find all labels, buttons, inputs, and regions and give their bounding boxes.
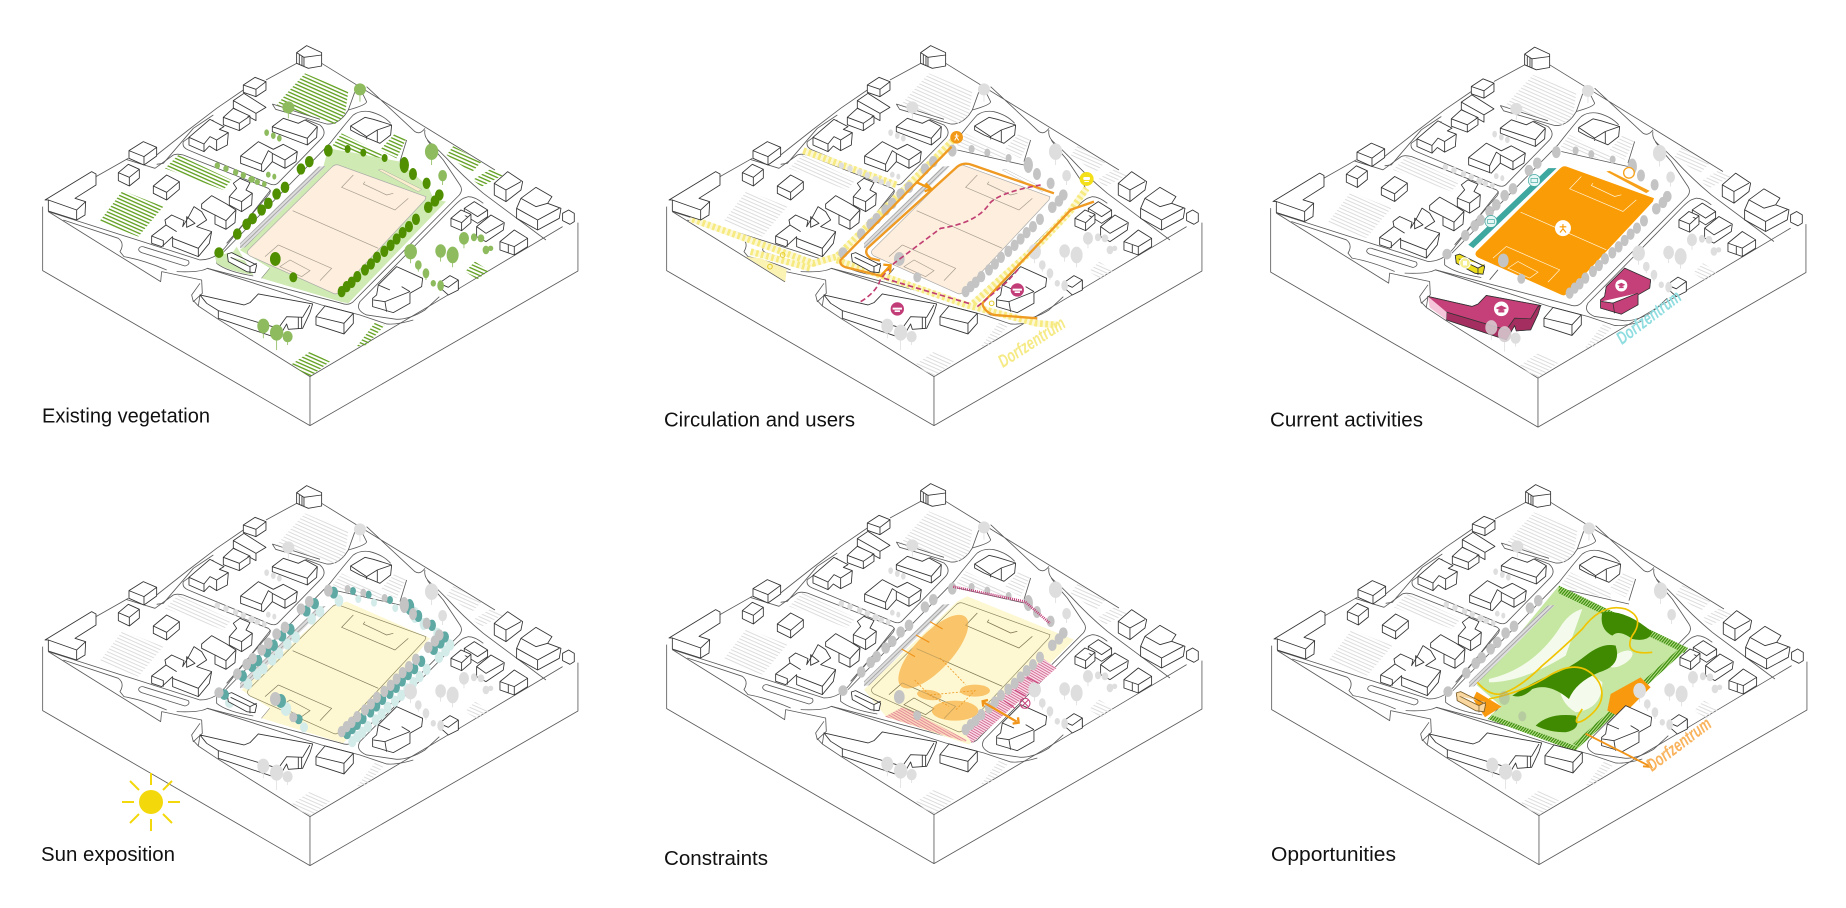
pale clearings [1489, 609, 1635, 712]
orange constraint ellipses [888, 605, 990, 721]
yellow pedestrian routes [690, 137, 1087, 325]
icon: football centre [1555, 220, 1571, 236]
gray trees along stand [1443, 595, 1543, 697]
icon: car user [1080, 172, 1094, 186]
small route markers [768, 253, 994, 306]
icon: walking user [950, 131, 963, 144]
axonometric site with green park proposal [1272, 485, 1807, 865]
dotted links [915, 658, 975, 711]
heading: Existing vegetation [42, 406, 210, 428]
panel: sun exposition [41, 486, 578, 866]
heading: Circulation and users [664, 410, 855, 432]
icon: east building badge [1615, 279, 1627, 291]
panel: constraints [664, 484, 1202, 870]
axonometric site with sun and shadows [43, 486, 578, 866]
yellow filled plaza [746, 257, 787, 282]
route label: Dorfzentrum [1612, 286, 1685, 348]
heading: Opportunities [1271, 844, 1396, 866]
icon: stand badge north [1528, 174, 1540, 186]
icon: school user left [891, 302, 904, 316]
icon: sun [122, 773, 180, 831]
axonometric site with constraints [667, 484, 1202, 864]
orange arrows [880, 182, 931, 277]
pink building east [1601, 268, 1651, 314]
route label: Dorfzentrum [1642, 713, 1715, 775]
translucent trees over park [1499, 691, 1526, 721]
yellow meandering paths [1477, 608, 1652, 722]
pale orange building [1456, 692, 1486, 712]
arrow to village centre [1586, 734, 1651, 767]
pink school building [1446, 305, 1541, 340]
icon: yellow building badge [1460, 258, 1470, 268]
orange activity patches [1473, 677, 1651, 717]
school tree overlay [1485, 320, 1511, 342]
route label: Dorfzentrum [994, 313, 1069, 371]
hatched east band [963, 659, 1057, 743]
orange double arrows [902, 622, 1019, 724]
panel: opportunities [1271, 485, 1807, 866]
heading: Current activities [1270, 410, 1423, 432]
yellow building [1455, 254, 1485, 275]
pitch lines over ellipses [889, 613, 1032, 719]
heading: Sun exposition [41, 844, 175, 866]
panel: current activities [1270, 47, 1806, 432]
axonometric site with vegetation [43, 46, 578, 426]
pink double arrows [1004, 677, 1038, 708]
panel: existing vegetation [42, 46, 578, 428]
park lawn [1477, 586, 1688, 747]
panel: circulation and users [664, 46, 1202, 432]
icon: school user right [1011, 283, 1024, 297]
icon: prohibited crossing [1020, 698, 1030, 708]
hedges [1488, 586, 1688, 751]
heading: Constraints [664, 848, 768, 870]
icon: stand badge south [1485, 215, 1497, 227]
pink fence line [953, 587, 1050, 623]
pink dashed routes [861, 185, 1041, 307]
axonometric site with activities [1271, 47, 1806, 427]
icon: orange strip badge [1624, 167, 1634, 178]
dark green planting [1512, 612, 1652, 732]
orange circulation lines [840, 147, 1094, 318]
icon: school badge [1494, 301, 1509, 316]
axonometric site with circulation routes [667, 46, 1202, 426]
hatched south strip [885, 707, 967, 742]
